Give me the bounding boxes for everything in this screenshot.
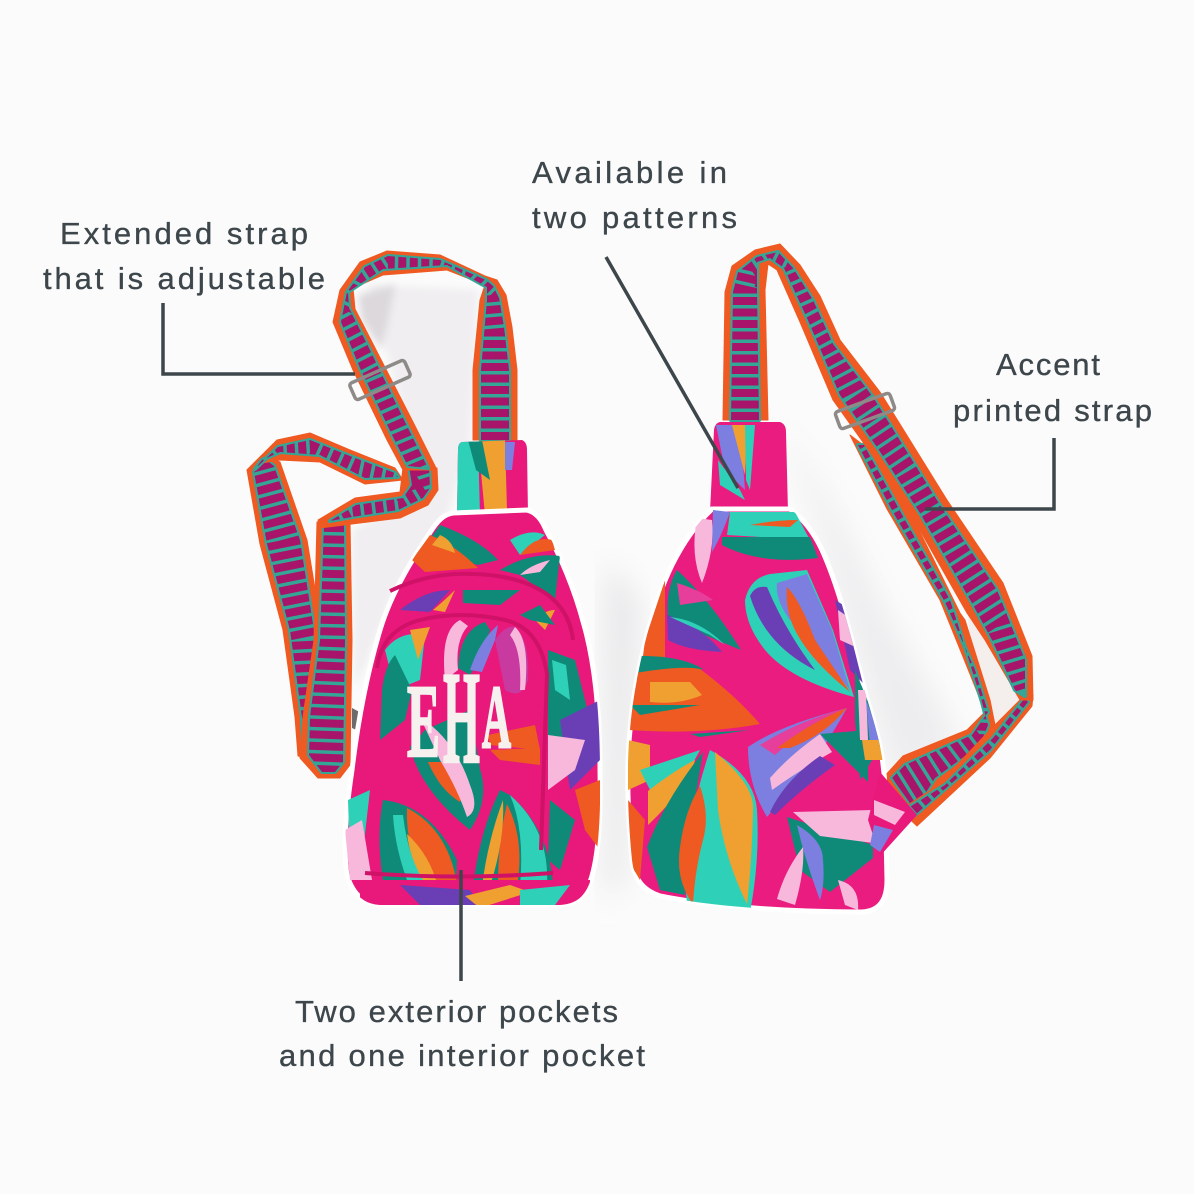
big centre leaf <box>745 570 854 697</box>
leader line: two patterns <box>606 257 738 488</box>
monogram EHA: E <box>407 664 440 779</box>
leader line: printed strap <box>925 438 1054 509</box>
centre teal leaf <box>410 710 483 830</box>
left bag strap <box>247 251 517 778</box>
lower-left leaves <box>628 740 650 790</box>
monogram EHA: H <box>443 644 480 791</box>
label: pockets <box>279 994 645 1073</box>
big orange leaf <box>635 656 703 680</box>
pocket leaves <box>385 634 424 684</box>
left strap buckle <box>349 360 411 400</box>
zipper seams <box>365 574 573 876</box>
right side fragments <box>548 650 587 737</box>
leader line: adjustable strap <box>163 303 355 374</box>
right strap buckle <box>835 393 895 429</box>
left bag <box>247 251 600 910</box>
left bag: A <box>482 668 511 767</box>
left small leaves <box>667 570 741 650</box>
label: extended strap: Extended strap <box>60 216 308 251</box>
label: accent strap: printed strap <box>953 393 1152 428</box>
lower mid leaf <box>473 790 553 886</box>
lower-right leaves <box>787 817 873 892</box>
soft shadows <box>352 285 1028 900</box>
centre-right spray <box>748 708 847 817</box>
label: extended strap <box>43 216 325 296</box>
bottom band <box>360 880 590 905</box>
right bag strap <box>723 244 1033 826</box>
monogram EHA <box>407 644 511 791</box>
label: available patterns <box>532 155 737 235</box>
left bag neck <box>457 440 528 510</box>
label: available patterns: Available in <box>532 155 727 190</box>
label: available patterns: two patterns <box>532 200 737 235</box>
label: accent strap: Accent <box>996 347 1100 382</box>
right bag strap tab <box>868 772 917 856</box>
lower left big leaf <box>379 800 457 880</box>
label: accent strap <box>953 347 1152 428</box>
label: pockets: and one interior pocket <box>279 1038 645 1073</box>
right bag <box>628 244 1033 912</box>
left bag body <box>345 510 600 910</box>
right side panel fragments <box>835 600 863 683</box>
top arcs <box>727 512 808 537</box>
right bag neck <box>710 422 788 508</box>
upper left leaves <box>432 525 498 565</box>
label: pockets: Two exterior pockets <box>295 994 618 1029</box>
label: extended strap: that is adjustable <box>43 261 325 296</box>
leader line: pockets <box>459 870 463 981</box>
left bag zip pull <box>352 708 378 740</box>
right bag body <box>628 509 887 912</box>
